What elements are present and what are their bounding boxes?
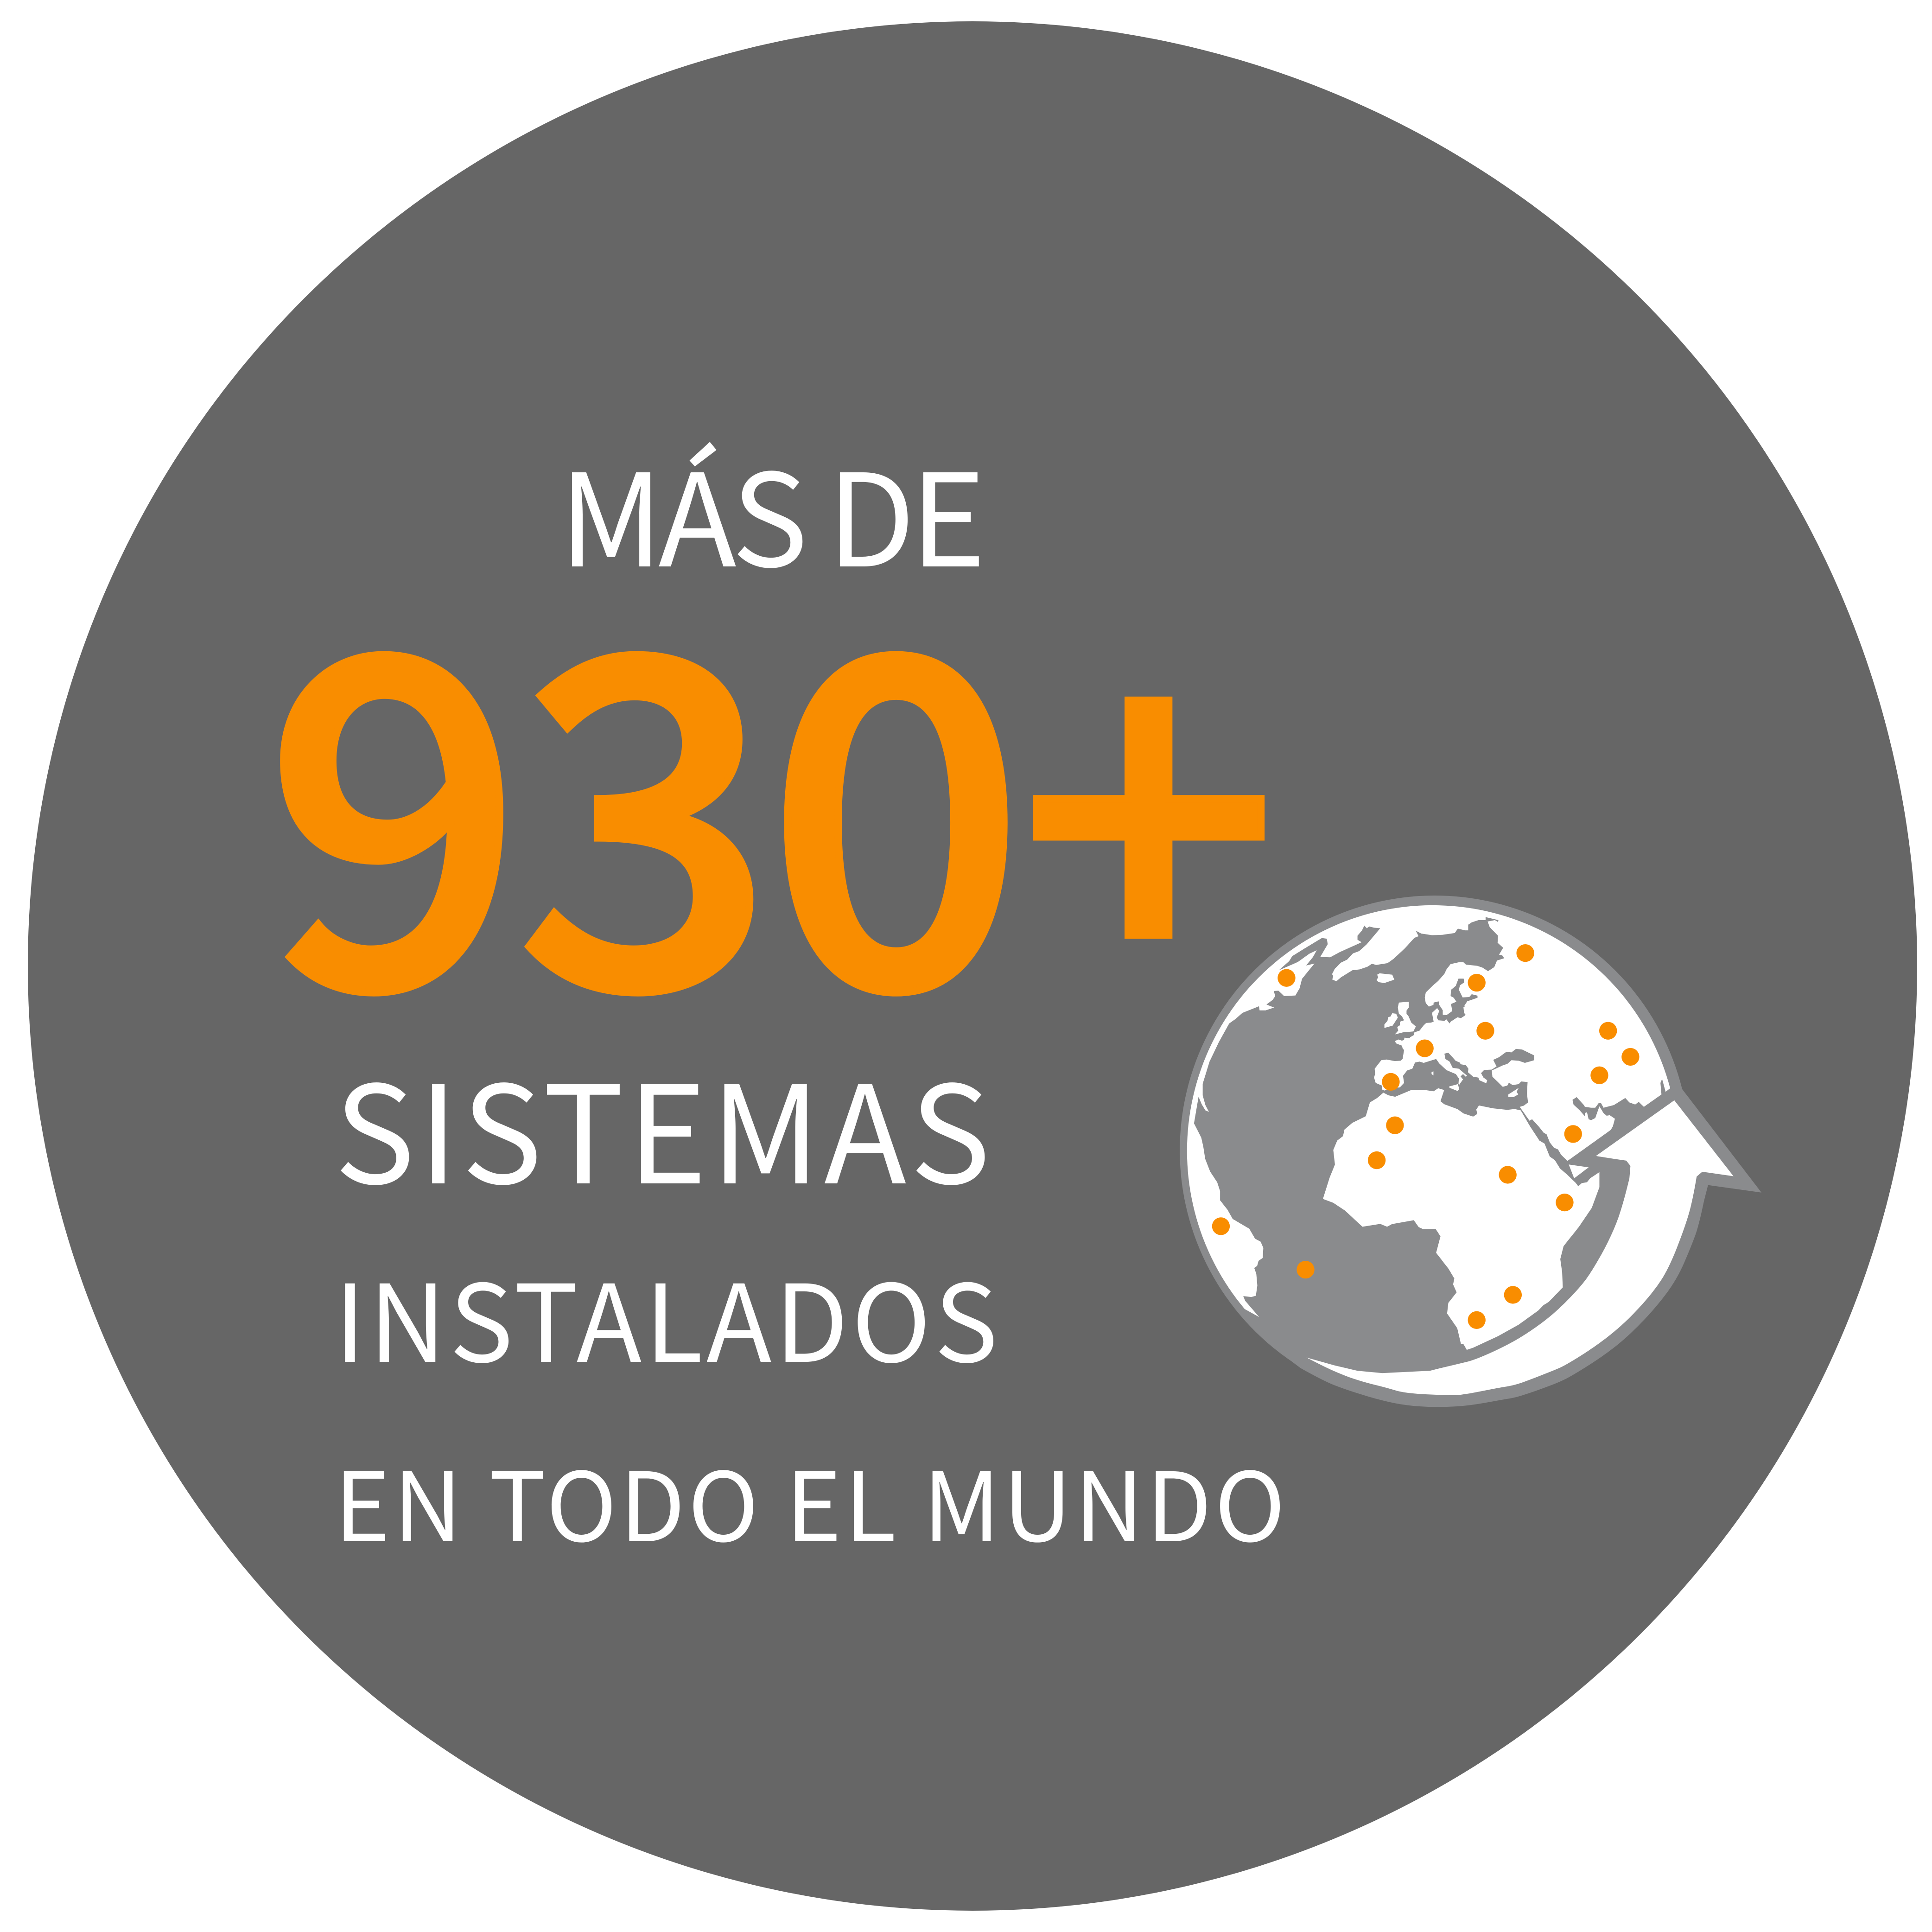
installation site dots [1212,944,1640,1329]
text: INSTALADOS: INSTALADOS [334,1238,998,1393]
land: Africa [1323,1088,1599,1350]
big number: 930+: 930+ [265,460,1278,1118]
arrow sweep [1306,1100,1734,1395]
globe and arrow outline [1180,896,1761,1407]
text: MÁS DE: MÁS DE [559,418,986,604]
text: EN TODO EL MUNDO: EN TODO EL MUNDO [334,1431,1285,1569]
land: Americas, Greenland and Eurasia [1187,905,1670,1317]
text: SISTEMAS: SISTEMAS [334,1027,991,1223]
islands [1377,973,1589,1178]
icon: globe with circular arrow [1180,896,1761,1407]
